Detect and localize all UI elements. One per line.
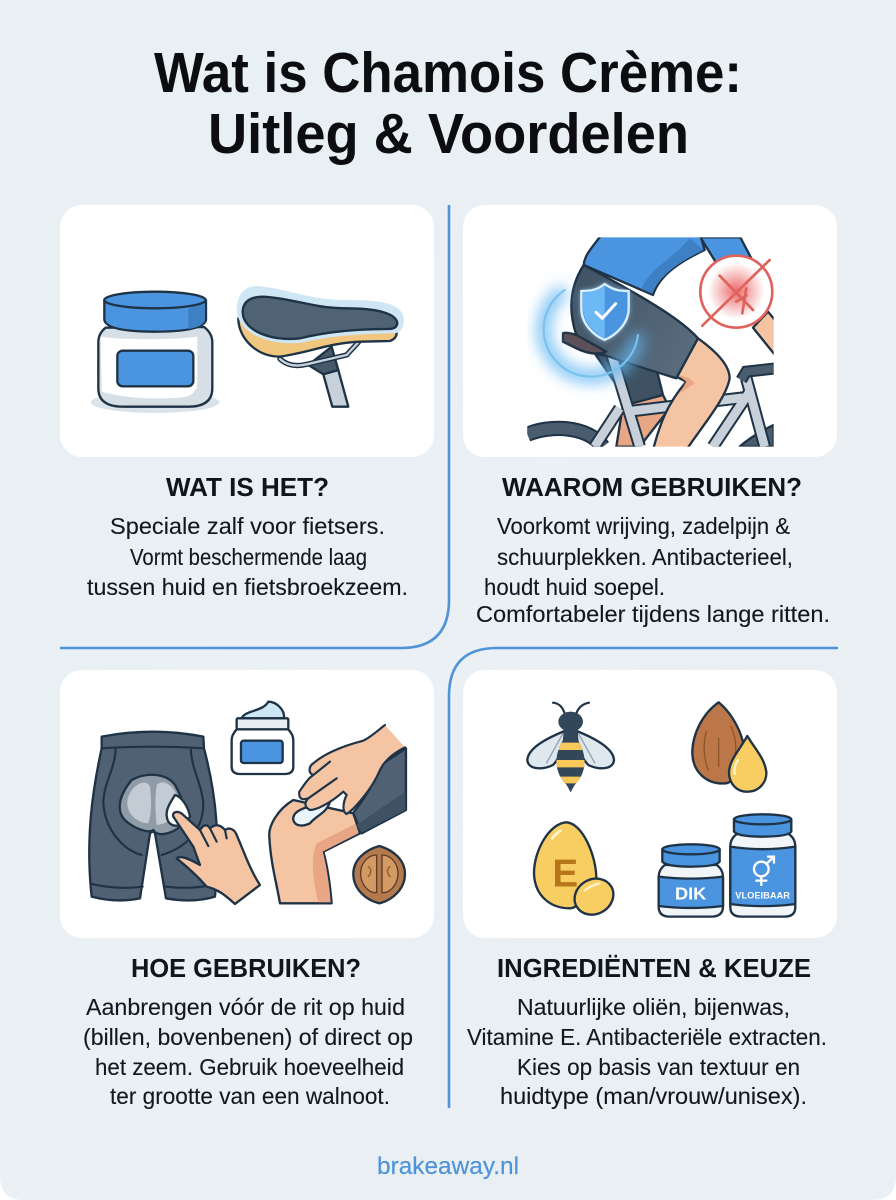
heading: ingredienten en keuze: INGREDIËNTEN & KEUZE [497,955,811,983]
arm [700,237,776,357]
icon: small jar dik: DIK [675,883,707,903]
text: hoe gebruiken: het zeem. Gebruik hoeveelheid [95,1054,404,1080]
icon: small cream jar [232,702,293,774]
far leg [595,353,670,447]
title: Uitleg & Voordelen [208,102,689,166]
text: ingredienten en keuze: Natuurlijke oliën, bijenwas, [517,994,790,1020]
icon: prohibited chafing [700,256,772,328]
icon: pointing hand [173,812,260,904]
text: waarom gebruiken: Comfortabeler tijdens lange ritten. [476,601,830,627]
text: wat is het: tussen huid en fietsbroekzeem. [87,574,408,600]
icon: gender symbol [754,857,774,885]
shorts [571,265,698,378]
rear wheel [527,428,603,447]
icon: small jar dik [659,844,723,917]
illustration: applying cream [89,702,406,904]
icon: hand on knee [299,725,405,814]
text: ingredienten en keuze: Vitamine E. Antibacteriële extracten. [467,1024,827,1050]
icon: cream jar [91,292,219,413]
heading: wat is het: WAT IS HET? [166,474,329,502]
illustration: ingredients [527,702,795,922]
divider: bottom right section [449,648,838,1108]
text: waarom gebruiken: houdt huid soepel. [484,574,665,600]
text: hoe gebruiken [83,994,413,1109]
text: waarom gebruiken [476,513,830,627]
icon: almond with oil drop [692,702,766,792]
icon: knee with shorts [269,748,406,903]
icon: large jar vloeibaar: VLOEIBAAR [735,890,790,900]
seat [563,333,606,354]
card: wat is het [60,205,434,457]
card: waarom gebruiken [463,205,837,457]
text: ingredienten en keuze: Kies op basis van textuur en [517,1054,800,1080]
text: hoe gebruiken: (billen, bovenbenen) of direct op [83,1024,413,1050]
jersey [584,235,705,295]
heading: hoe gebruiken: HOE GEBRUIKEN? [131,955,361,983]
icon: bee [527,703,614,792]
footer: website: brakeaway.nl [377,1153,519,1180]
illustration: jar and saddle [91,286,404,413]
title: Wat is Chamois Crème: [154,41,742,105]
card: ingredienten en keuze [463,670,837,938]
text: wat is het: Vormt beschermende laag [130,544,367,570]
panel: wat is het [60,205,434,600]
icon: bicycle saddle [237,286,404,407]
divider: top left section [60,205,449,648]
panel: ingredienten en keuze [463,670,837,1109]
icon: walnut [353,846,405,903]
icon: vitamin E capsule: E [552,853,578,896]
cream on knee [293,802,330,826]
panel: waarom gebruiken [463,205,837,627]
text: wat is het: Speciale zalf voor fietsers. [110,513,385,539]
front wheel [740,425,774,447]
panel: hoe gebruiken [60,670,434,1109]
text: waarom gebruiken: Voorkomt wrijving, zadelpijn & [497,513,790,539]
heading: waarom gebruiken: WAAROM GEBRUIKEN? [502,474,802,502]
text: hoe gebruiken: Aanbrengen vóór de rit op huid [86,994,405,1020]
card: hoe gebruiken [60,670,434,938]
text: wat is het [87,513,408,600]
icon: large jar vloeibaar [730,814,795,917]
icon: shield with check [581,284,629,340]
text: hoe gebruiken: ter grootte van een walnoot. [110,1083,390,1109]
title [154,41,742,166]
text: ingredienten en keuze: huidtype (man/vrouw/unisex). [500,1083,807,1109]
icon: vitamin E capsule [534,822,620,922]
illustration: cyclist with shield [527,235,776,450]
icon: cycling shorts with pad [89,732,217,900]
bicycle frame [595,353,776,447]
text: waarom gebruiken: schuurplekken. Antibacterieel, [497,544,793,570]
cream dab on pad [167,795,190,826]
protective glow arc [544,290,638,377]
near leg [653,338,730,450]
text: ingredienten en keuze [467,994,827,1109]
